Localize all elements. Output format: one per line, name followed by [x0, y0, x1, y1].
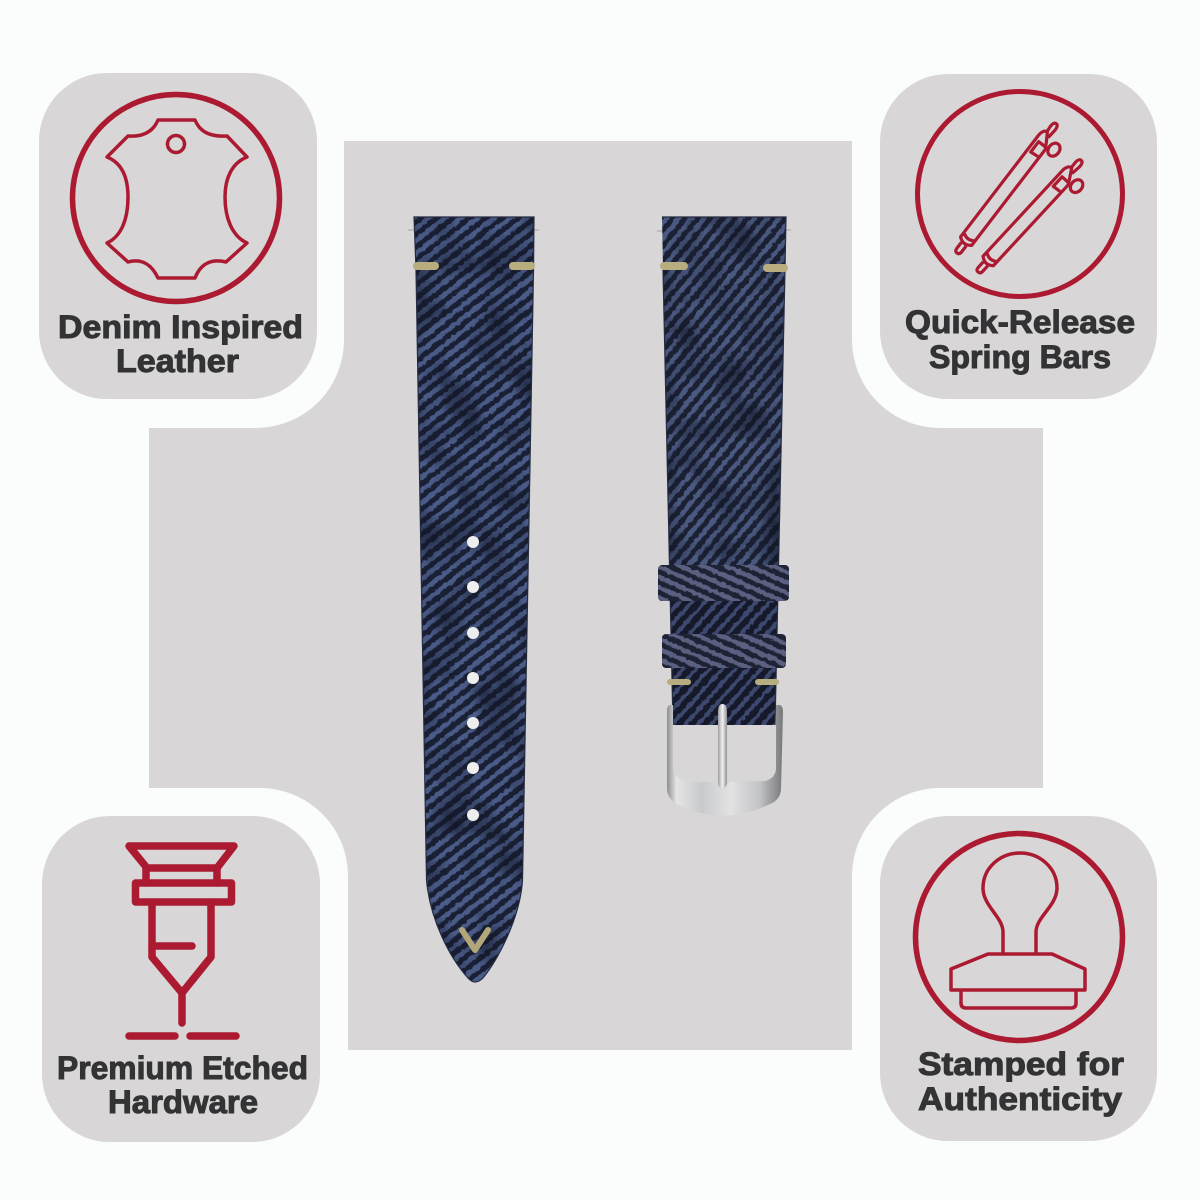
strap edge: long piece [414, 217, 534, 982]
strap edge: buckle piece [662, 217, 786, 725]
panel: stamped for authenticity [880, 816, 1157, 1141]
denim body: long piece [414, 218, 534, 982]
spring bar tips: buckle piece [657, 230, 791, 231]
label: premium etched hardware: Premium Etched [57, 1050, 308, 1086]
icon: stamp in circle [916, 834, 1122, 1040]
icon: spring bars in circle [918, 92, 1122, 296]
label: premium etched hardware [57, 1050, 308, 1120]
strap holes [467, 536, 479, 821]
watch strap: long piece [408, 216, 539, 983]
steel buckle [667, 704, 783, 816]
denim body: buckle piece [662, 218, 786, 725]
label: denim inspired leather [58, 309, 303, 379]
label: quick-release spring bars [905, 304, 1135, 375]
icon: leather hide in circle [72, 94, 280, 302]
panel: premium etched hardware [42, 816, 320, 1142]
backdrop panel: central cross [149, 141, 1043, 1050]
panel: denim inspired leather [39, 73, 317, 399]
panel: quick-release spring bars [880, 74, 1157, 399]
label: stamped for authenticity: Stamped for [918, 1046, 1124, 1082]
label: quick-release spring bars: Spring Bars [929, 339, 1111, 375]
stitches: buckle piece [664, 266, 784, 682]
stitches: long piece [417, 262, 531, 270]
label: denim inspired leather: Leather [116, 343, 239, 379]
keeper loop 2 [662, 634, 786, 668]
label: denim inspired leather: Denim Inspired [58, 309, 303, 345]
label: stamped for authenticity: Authenticity [918, 1081, 1122, 1117]
label: quick-release spring bars: Quick-Release [905, 304, 1135, 340]
label: stamped for authenticity [918, 1046, 1124, 1117]
v stitch at strap tip [462, 930, 488, 950]
watch strap: buckle piece [657, 216, 791, 815]
label: premium etched hardware: Hardware [108, 1084, 258, 1120]
keeper loop 1 [658, 565, 789, 601]
spring bar tips: long piece [408, 229, 539, 231]
icon: etching laser head [129, 846, 236, 1036]
